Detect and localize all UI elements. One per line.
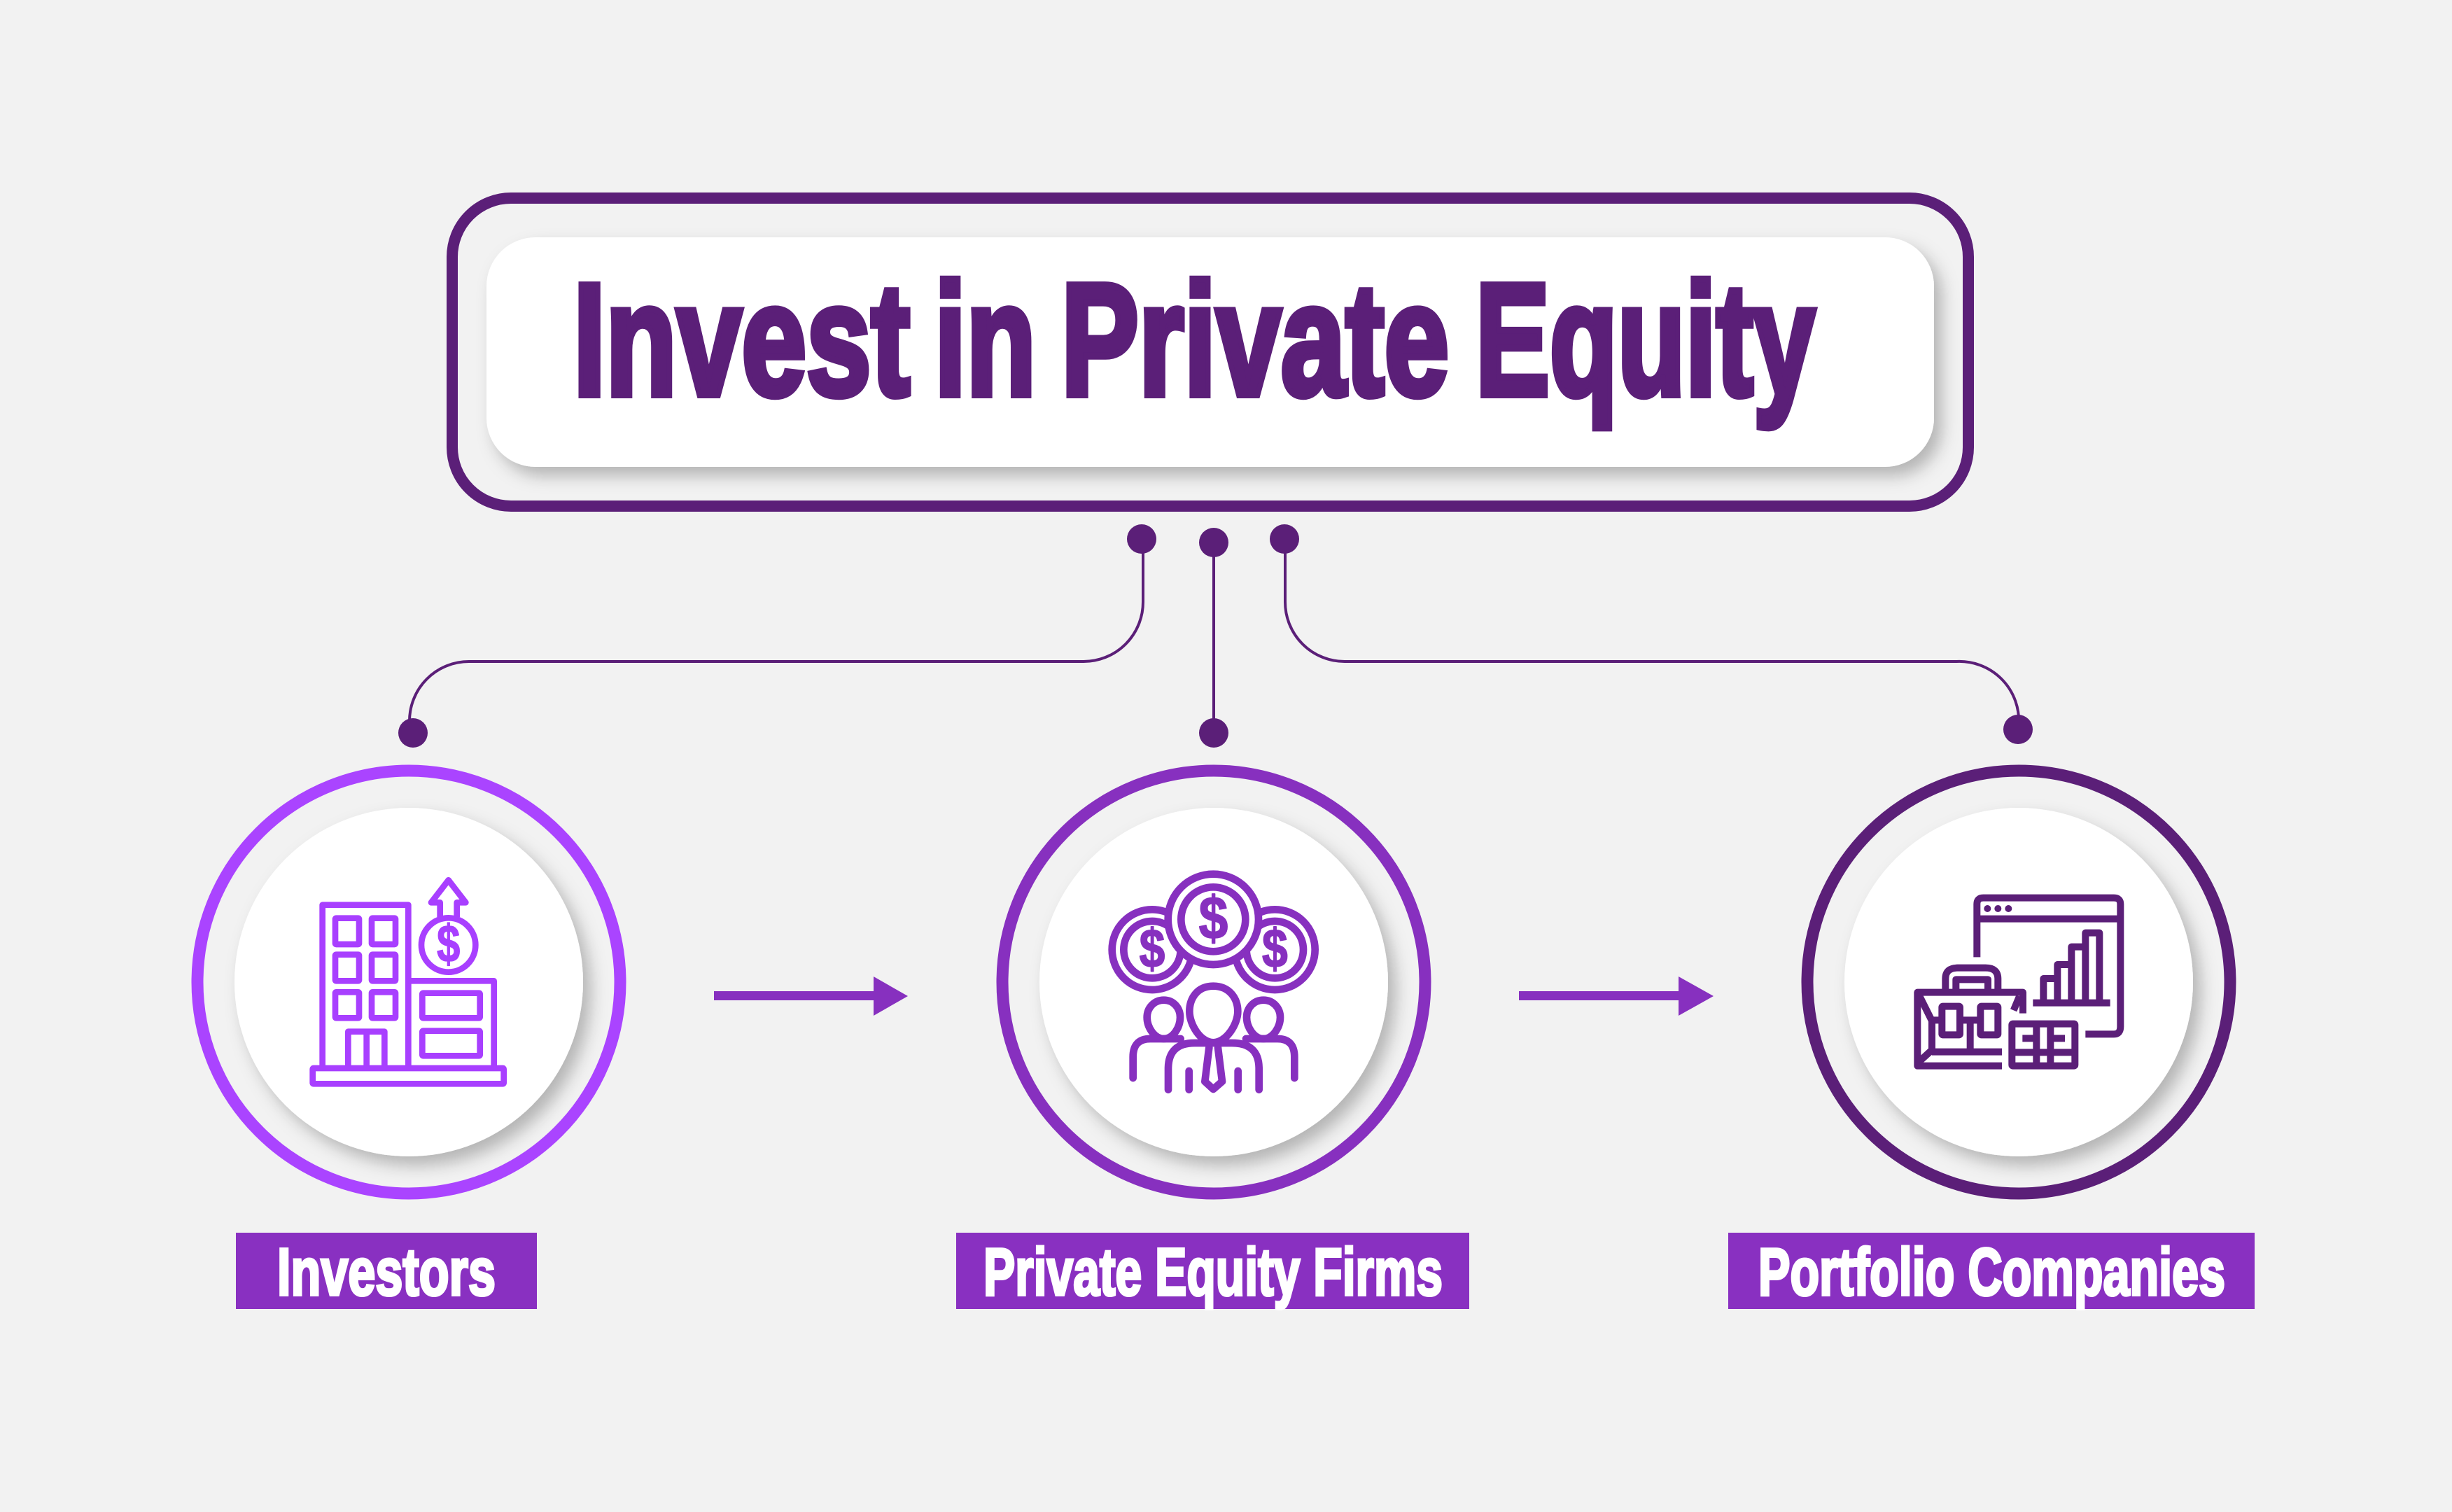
connector: title to portfolio companies	[1270, 524, 2033, 744]
icon: investors with dollar coins: $	[1199, 885, 1228, 952]
connector: title to private equity firms	[1199, 528, 1228, 748]
title: Invest	[573, 251, 910, 429]
connector: title to investors	[398, 524, 1156, 748]
icon: investors with dollar coins: $	[1262, 918, 1288, 979]
icon: building with rising dollar coin	[313, 880, 504, 1084]
title card	[486, 237, 1934, 467]
arrow: private equity firms to portfolio companies	[1519, 976, 1714, 1016]
icon: investors with dollar coins: $	[1140, 918, 1165, 979]
panel: title frame	[452, 198, 1968, 506]
panel: investors circle	[197, 771, 620, 1194]
icon: building with rising dollar coin: $	[437, 914, 460, 973]
label: investors: Investors	[277, 1235, 496, 1310]
title	[573, 251, 1815, 429]
arrow: investors to private equity firms	[714, 976, 908, 1016]
label: portfolio companies: Portfolio Companies	[1758, 1235, 2225, 1310]
icon: investors with dollar coins	[1112, 874, 1315, 1090]
title: in	[934, 251, 1036, 429]
panel: portfolio companies circle	[1807, 771, 2230, 1194]
title: Private	[1061, 251, 1449, 429]
panel: private equity firms circle	[1002, 771, 1425, 1194]
label: private equity firms: Private Equity Firms	[983, 1235, 1443, 1310]
title: Equity	[1476, 251, 1815, 429]
icon: briefcase, cash and growth chart	[1917, 898, 2120, 1066]
